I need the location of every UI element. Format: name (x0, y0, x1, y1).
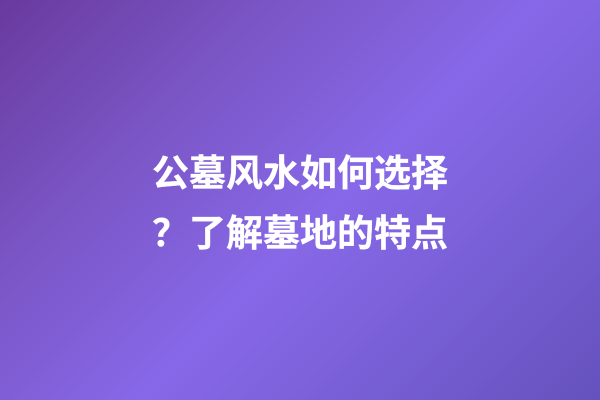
title line 2: ？了解墓地的特点 (152, 213, 448, 254)
title (152, 153, 448, 254)
title line 1: 公墓风水如何选择 (152, 153, 448, 194)
